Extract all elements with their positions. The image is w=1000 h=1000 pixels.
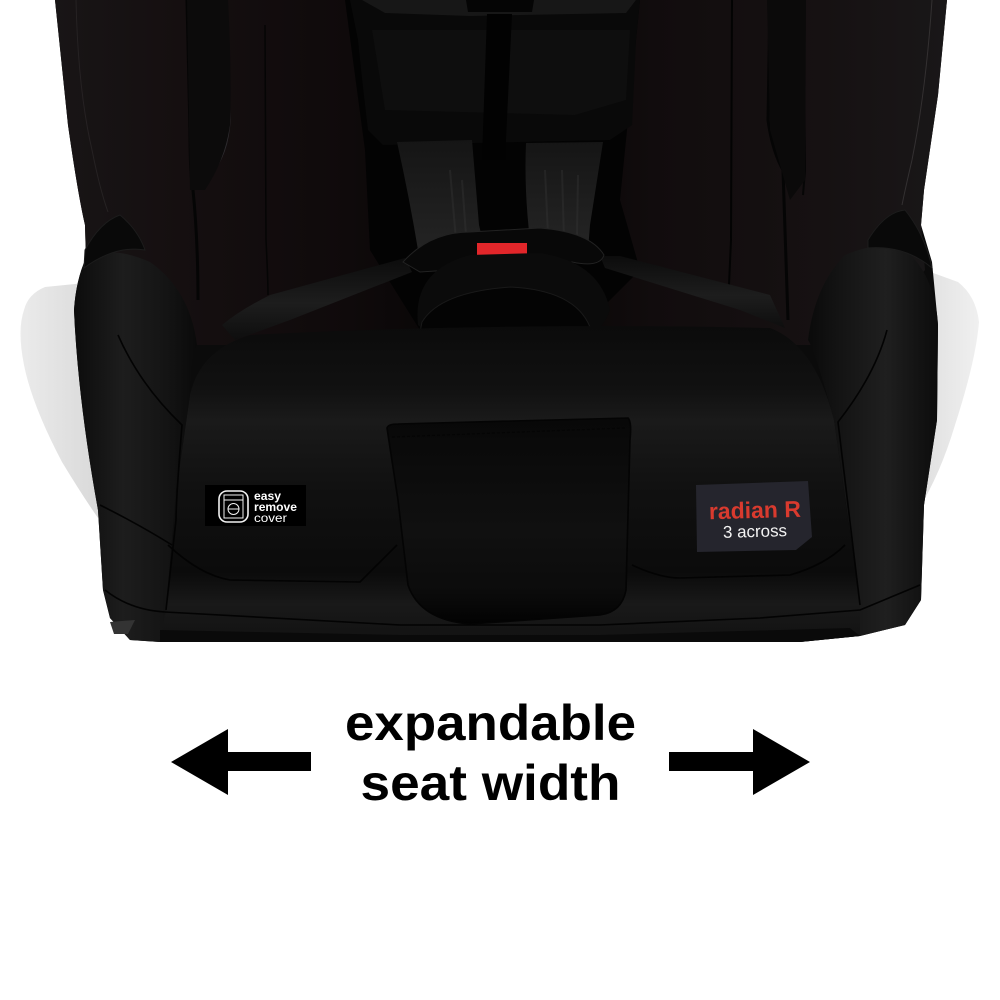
ghost outline: seat wing expanded right bbox=[880, 270, 979, 510]
label: easy remove cover bbox=[205, 485, 306, 526]
chest pad highlight bbox=[372, 30, 630, 115]
crotch pad cut-out bbox=[420, 287, 590, 332]
central dark channel bbox=[345, 0, 640, 330]
seat back shell bbox=[55, 0, 947, 345]
caption line 1: expandable bbox=[345, 695, 636, 751]
radian R text: radian R bbox=[709, 496, 802, 524]
inner right bolster shadow bbox=[767, 0, 806, 200]
chest clip bbox=[362, 0, 636, 16]
remove text: remove bbox=[254, 500, 297, 514]
caption line 2: seat width bbox=[360, 755, 620, 811]
car seat bbox=[55, 0, 947, 642]
flap stitching bbox=[392, 428, 625, 437]
easy text: easy bbox=[254, 489, 281, 503]
bottom shadow strip bbox=[160, 628, 860, 642]
wing seams bbox=[100, 330, 920, 625]
back side panel seams bbox=[76, 0, 932, 320]
strap webbing texture bbox=[450, 170, 578, 240]
seat silhouette bbox=[55, 0, 947, 642]
arrow: left bbox=[171, 729, 311, 795]
harness chest pad bbox=[350, 0, 640, 145]
washer icon bbox=[219, 491, 248, 522]
right shoulder strap bbox=[526, 142, 603, 250]
divide between chest pads bbox=[482, 14, 512, 160]
right lap belt bbox=[600, 256, 785, 328]
label: radian R 3 across bbox=[696, 481, 812, 552]
right arm wing bbox=[808, 246, 938, 636]
centre flap bbox=[387, 418, 631, 624]
3 across text: 3 across bbox=[723, 521, 787, 542]
crotch pad bbox=[417, 253, 610, 335]
seat cushion bbox=[160, 326, 860, 642]
inner left bolster shadow bbox=[187, 0, 231, 190]
arrow: right bbox=[669, 729, 810, 795]
right wing hinge bbox=[868, 210, 932, 268]
ghost outline: seat wing expanded left bbox=[20, 283, 120, 525]
red buckle button bbox=[477, 243, 527, 255]
base foot bbox=[110, 620, 135, 634]
left shoulder strap bbox=[397, 140, 485, 262]
caption: expandable seat width bbox=[345, 695, 636, 811]
buckle housing bbox=[403, 228, 604, 272]
left lap belt bbox=[222, 258, 412, 340]
left arm wing bbox=[74, 252, 197, 642]
left wing hinge bbox=[84, 215, 145, 268]
cover text: cover bbox=[254, 511, 287, 525]
